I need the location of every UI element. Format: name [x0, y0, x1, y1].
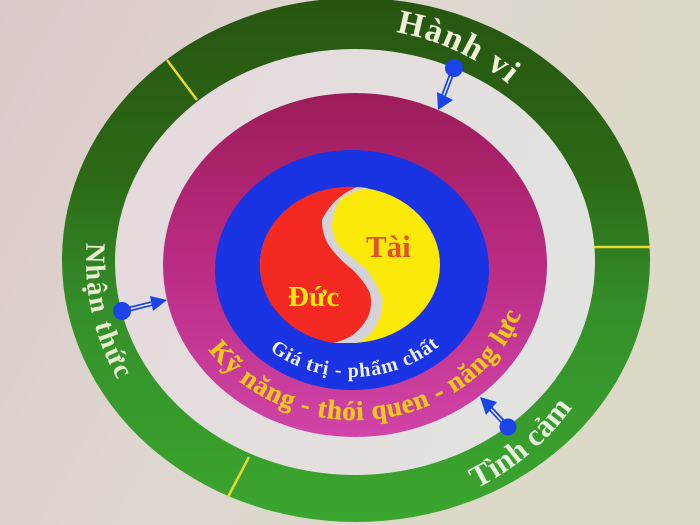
arrow: Tình cảm to skills: [480, 397, 516, 436]
arrow: Nhận thức to skills: [113, 296, 167, 320]
label: Kỹ năng - thói quen - năng lực: Kỹ năng - thói quen - năng lực: [208, 310, 520, 424]
blue ellipse: values layer: [215, 150, 489, 390]
label: Giá trị - phẩm chất: Giá trị - phẩm chất: [272, 338, 439, 382]
label: Tình cảm: Tình cảm: [467, 401, 572, 486]
yin-yang core: [260, 187, 440, 343]
label: Nhận thức: Nhận thức: [82, 243, 128, 379]
label: Hành vi: Hành vi: [396, 10, 520, 84]
arrow: Hành vi to skills: [437, 59, 463, 110]
magenta ellipse: skills layer: [163, 93, 547, 437]
label: Tài: Tài: [366, 229, 411, 264]
label: Đức: Đức: [288, 281, 339, 313]
